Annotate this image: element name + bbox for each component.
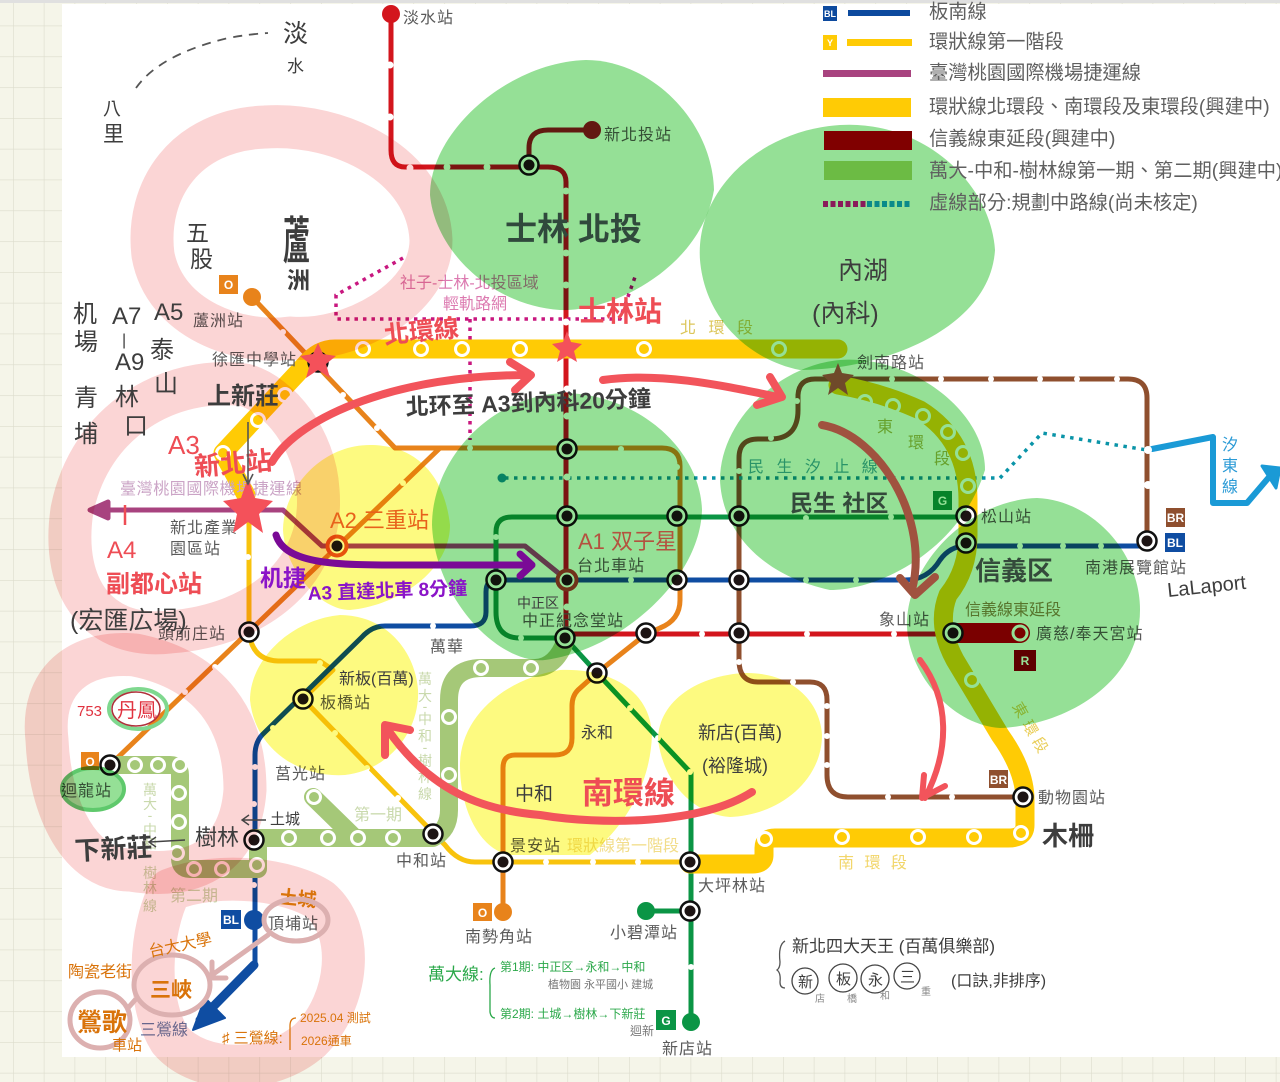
line: Zhonghe-Xinlu orange — [110, 288, 680, 921]
label: south ring section: 南 環 段 — [838, 854, 910, 872]
star: Shilin — [552, 331, 582, 362]
label: LRT network: 社子-士林-北投區域 — [400, 274, 539, 292]
note: Honghui plaza: (宏匯広場) — [70, 607, 187, 635]
legend: circular first stage — [823, 31, 1064, 53]
note: New Taipei station: 新北站 — [193, 445, 273, 482]
badge R — [1014, 650, 1036, 671]
note: four kings of New Taipei: 永 — [868, 972, 883, 989]
highlight: Xindian — [658, 673, 822, 817]
badge G Songshan: G — [938, 494, 947, 508]
note: A3 label: A3 — [168, 430, 200, 460]
note: Xia Xinzhuang: 下新莊 — [74, 832, 153, 866]
line: Shilin-Beitou LRT dotted — [336, 258, 635, 440]
note: Luzhou: 蘆 — [283, 213, 310, 270]
arrow: south ring — [385, 725, 752, 821]
small transfer dots — [182, 62, 1152, 970]
legend: Xinyi extension: 信義線東延段(興建中) — [929, 128, 1115, 150]
label: Wanda line vertical left: 大 — [143, 796, 157, 812]
legend: planned dotted: 虛線部分:規劃中路線(尚未核定) — [929, 192, 1198, 214]
printed station labels: 新店站 — [662, 1040, 713, 1058]
label: Xinyi east extension: 信義線東延段 — [965, 601, 1061, 619]
arrow: Shilin to Neihu — [603, 377, 782, 405]
highlight: Neihu — [700, 125, 995, 370]
label: Wanda line vertical right: 和 — [418, 728, 432, 744]
note: A5 Taishan: A5 — [154, 299, 183, 326]
label: Wanda line vertical right: - — [423, 739, 428, 755]
label: east ring section: 環 — [908, 435, 924, 452]
note: Tucheng orange: 土城 — [277, 886, 318, 912]
note: Tamsui: 淡 — [283, 20, 308, 48]
note: A4 station: A4 — [107, 537, 136, 564]
note: airport Qingpu: 机 — [73, 301, 97, 328]
note: Sanying line schedule: 2026通車 — [301, 1033, 352, 1048]
note: Xinban million: 新板(百萬) — [339, 670, 414, 688]
label: Minsheng-Xizhi line: 民 生 汐 止 線 — [748, 458, 882, 476]
label: circular first stage: 環狀線第一階段 — [567, 836, 679, 855]
note: Sanxia: 三峽 — [150, 979, 192, 1002]
printed station labels: 劍南路站 — [857, 354, 925, 372]
badge BR Zoo: BR — [990, 773, 1007, 787]
badge BR Nangang — [1166, 508, 1185, 527]
note: Wugu: 股 — [190, 246, 213, 272]
note: A5 Taishan: 山 — [154, 371, 178, 398]
label: Wanda line vertical right: 樹 — [418, 753, 432, 769]
note: Tamsui: 水 — [287, 57, 304, 76]
printed station labels: 迴龍站 — [61, 782, 112, 800]
note: Bali: 八 — [103, 99, 121, 119]
label: phase two: 第二期 — [170, 886, 218, 905]
pink highlight scribbles — [46, 127, 431, 1066]
note: four kings of New Taipei: 新 — [798, 974, 813, 991]
line: Songshan-Xindian green — [496, 517, 966, 1031]
note: four kings of New Taipei: 三 — [900, 969, 915, 986]
printed station labels: 中正紀念堂站 — [522, 611, 624, 630]
label: Wanda line vertical left: 線 — [143, 898, 157, 914]
note: Zhonghe: 中和 — [515, 783, 553, 805]
note: airport express: 机捷 — [260, 565, 306, 591]
printed station labels: 園區站 — [170, 540, 221, 558]
printed station labels: 頭前庄站 — [158, 625, 226, 643]
note: A3 express: A3 直達北車 8分鐘 — [307, 576, 467, 605]
note: dashed route to Bali — [136, 33, 268, 88]
printed station labels: 蘆洲站 — [193, 312, 244, 330]
arrow: Xiangshan to Muzha — [920, 660, 945, 798]
note: South ring: 南環線 — [582, 776, 675, 811]
highlight: Zhonghe Yonghe — [460, 670, 652, 855]
badge G Songshan — [933, 491, 952, 510]
note: Shilin station: 士林站 — [578, 296, 662, 327]
legend: Bannan: 板南線 — [929, 1, 987, 23]
note: Neike: (內科) — [812, 300, 879, 328]
label: phase one: 第一期 — [354, 805, 402, 824]
badge O Huilong: O — [85, 755, 95, 769]
badge O Luzhou: O — [224, 278, 233, 292]
note: Danfeng 753 — [77, 689, 167, 729]
label: Wanda line vertical right: 大 — [418, 688, 432, 704]
note: four kings of New Taipei: 新北四大天王 (百萬俱樂部) — [792, 937, 995, 956]
note: NTU: 台大大學 — [147, 930, 213, 961]
note: Wanda line plan: 植物園 永平國小 建城 — [548, 977, 653, 991]
note: north ring time: 北环至 A3到內科20分鐘 — [405, 385, 651, 420]
note: Tucheng arrow — [242, 815, 266, 825]
label: Wanda line vertical left: 萬 — [143, 782, 157, 798]
label: east ring lower: 環 — [1018, 717, 1041, 739]
note: Sanying line schedule — [222, 1010, 371, 1050]
badge O Luzhou — [219, 275, 238, 294]
note: A7 to A9 Linkou: 口 — [124, 413, 148, 440]
label: east ring lower: 東 — [1008, 699, 1031, 721]
note: airport Qingpu: 場 — [74, 329, 98, 356]
printed station labels: 南港展覽館站 — [1085, 559, 1187, 577]
label: Wanda line vertical left: 林 — [143, 880, 157, 896]
line: circular north section — [223, 349, 838, 495]
note: airport Qingpu: 埔 — [74, 421, 98, 448]
label: Wanda line vertical left: 中 — [143, 822, 157, 838]
note: A2 Sanchong: A2 三重站 — [330, 508, 429, 533]
printed station labels: 新北產業 — [170, 519, 238, 537]
scribble: Luzhou Wugu — [152, 127, 431, 339]
legend: ring sections: 環狀線北環段、南環段及東環段(興建中) — [929, 96, 1270, 118]
hand-drawn red route arrows — [272, 362, 945, 821]
printed station labels: 大坪林站 — [698, 877, 766, 895]
legend: Bannan — [823, 1, 987, 23]
note: Wanda line plan: 迴新 — [630, 1023, 654, 1038]
arrow: Neihu to Xiangshan — [822, 425, 935, 595]
printed station labels: 莒光站 — [275, 765, 326, 783]
note: A1 Twin towers: A1 双子星 — [578, 529, 677, 554]
badge BL Dingpu — [221, 910, 241, 929]
note: A7 to A9 Linkou: A9 — [115, 349, 144, 376]
line: circular east and south sections — [690, 385, 1025, 864]
label: east ring section: 段 — [934, 450, 950, 468]
interchange station centers — [104, 160, 1152, 916]
printed station labels: 萬華 — [430, 638, 464, 656]
interchange stations — [100, 156, 1156, 920]
note: A5 Taishan: 泰 — [150, 337, 174, 364]
note: Danfeng 753: 753 — [77, 703, 102, 720]
printed station labels: 徐匯中學站 — [212, 351, 297, 369]
note: Sanying circles and arrows — [70, 899, 328, 1048]
label: east ring section — [877, 418, 950, 468]
star: New Taipei industrial park — [223, 478, 273, 533]
label: Xidong line: 線 — [1222, 478, 1238, 496]
highlight: Huilong oval — [62, 768, 124, 810]
label: Xidong line: 東 — [1222, 457, 1238, 475]
note: Wugu: 五 — [186, 220, 209, 246]
note: Neihu: 內湖 — [838, 257, 888, 285]
pale line labels — [120, 274, 1238, 1039]
note: A4 station: 副都心站 — [106, 571, 202, 598]
label: LRT network: 輕軌路網 — [443, 295, 507, 313]
printed station labels: 廣慈/奉天宮站 — [1036, 625, 1143, 643]
legend: Bannan: BL — [824, 9, 836, 19]
printed station labels: 象山站 — [879, 611, 930, 629]
label: Wanda line vertical right: 中 — [418, 711, 432, 727]
printed station labels: 小碧潭站 — [610, 924, 678, 942]
legend: airport MRT: 臺灣桃園國際機場捷運線 — [929, 62, 1141, 84]
note: four kings of New Taipei: 店 — [815, 992, 825, 1005]
line: Wenhu brown — [739, 379, 1147, 797]
label: Wanda line vertical left: - — [148, 846, 153, 862]
note: A7 to A9 Linkou: | — [122, 332, 126, 349]
printed station labels: 景安站 — [510, 837, 561, 855]
legend — [823, 1, 1280, 214]
note: A7 to A9 Linkou: A7 — [112, 303, 141, 330]
note: LaLaport: LaLaport — [1166, 572, 1247, 602]
note: Sanying line schedule: ♯ 三鶯線: — [222, 1030, 283, 1047]
line: airport MRT purple — [90, 502, 567, 580]
highlight: Banqiao — [250, 615, 418, 775]
note: Shang Xinzhuang: 上新莊 — [207, 383, 279, 410]
note: four kings of New Taipei: 重 — [921, 985, 931, 998]
highlight: Taipei Main — [432, 393, 702, 660]
note: A7 to A9 Linkou: 林 — [115, 384, 139, 411]
line: Xidong solid blue arrow — [1152, 437, 1280, 503]
line badges — [81, 275, 1185, 1030]
label: Sanying line: 三鶯線 — [140, 1021, 188, 1039]
badge G Xindian — [656, 1010, 676, 1030]
label: Wanda line vertical left: 和 — [143, 836, 157, 852]
note: Bali: 里 — [103, 123, 124, 146]
label: Wanda line vertical right: 林 — [418, 769, 432, 785]
label: east ring lower — [1008, 699, 1051, 756]
note: four kings of New Taipei — [777, 937, 1046, 1005]
green district highlights — [62, 60, 1140, 810]
stars: key stations — [223, 331, 854, 533]
note: Zhongzheng district: 中正区 — [517, 595, 559, 611]
legend: circular first stage: Y — [827, 38, 833, 48]
note: Tucheng: 土城 — [270, 811, 300, 828]
label: Xidong line: 汐 — [1222, 436, 1238, 454]
badge BL Dingpu: BL — [223, 913, 239, 927]
line: Minsheng-Xizhi dotted — [498, 433, 1147, 482]
label: north ring section: 北 環 段 — [680, 319, 757, 337]
label: Wanda line vertical right: 萬 — [418, 671, 432, 687]
badge G Xindian: G — [661, 1014, 671, 1028]
star: Jiannan Road — [822, 363, 854, 395]
label: Wanda line vertical left: - — [148, 807, 153, 823]
badge BL Nangang — [1165, 533, 1185, 552]
note: Xindian million: 新店(百萬) — [698, 723, 782, 743]
highlight: Shilin Beitou — [430, 60, 714, 310]
note: four kings of New Taipei: 橋 — [847, 992, 857, 1005]
line: circular first stage yellow — [249, 500, 690, 862]
note: Yingge: 鶯歌 — [77, 1009, 127, 1037]
printed station labels: 動物園站 — [1038, 789, 1106, 807]
badge BR Nangang: BR — [1167, 511, 1184, 525]
note: airport Qingpu: 青 — [74, 385, 98, 412]
scribble: Tucheng Sanxia — [153, 879, 343, 1066]
scribble: Huilong Danfeng — [46, 654, 245, 872]
highlight: Sanchong — [283, 445, 450, 610]
label: Wanda line vertical right: 線 — [418, 786, 432, 802]
label: airport MRT: 臺灣桃園國際機場捷運線 — [120, 480, 303, 498]
label: east ring lower: 段 — [1028, 734, 1051, 756]
printed station labels: 南勢角站 — [465, 928, 533, 946]
note: A4 station — [106, 505, 202, 598]
printed station labels: 中和站 — [396, 852, 447, 870]
note: North ring: 北環線 — [383, 314, 460, 350]
badge O Nanshijiao: O — [478, 906, 487, 920]
printed station labels: 台北車站 — [577, 557, 645, 575]
note: Luzhou: 洲 — [287, 267, 310, 293]
legend: Wanda line: 萬大-中和-樹林線第一期、第二期(興建中) — [929, 160, 1280, 182]
label: Wanda line vertical right: - — [423, 698, 428, 714]
note: four kings of New Taipei: (口訣,非排序) — [951, 972, 1046, 990]
legend: circular first stage: 環狀線第一階段 — [929, 31, 1064, 53]
label: LRT network — [400, 274, 539, 313]
note: pottery street: 陶瓷老街 — [68, 963, 132, 981]
note: four kings of New Taipei: 板 — [836, 971, 851, 988]
note: Shilin Beitou: 士林 北投 — [505, 211, 642, 247]
printed station labels: 松山站 — [981, 508, 1032, 526]
note: down arrow to station — [243, 422, 253, 484]
label: east ring section: 東 — [877, 418, 893, 436]
arrow: A3 to Shilin — [272, 362, 531, 462]
badge O Nanshijiao — [473, 903, 492, 921]
note: Wanda line plan: 萬大線: — [428, 965, 484, 984]
note: Wanda line plan: 第2期: 土城→樹林→下新莊 — [500, 1006, 645, 1021]
note: Yulon: (裕隆城) — [702, 756, 768, 776]
thick line ring stations — [128, 342, 1028, 876]
note: Wanda line plan: 第1期: 中正区→永和→中和 — [500, 959, 645, 974]
printed station labels: 板橋站 — [320, 694, 371, 712]
line: Wanda-Shulin first phase — [254, 642, 565, 838]
legend: Xinyi extension — [824, 128, 1115, 150]
note: Yonghe: 永和 — [581, 724, 613, 742]
note: Shulin: 樹林 — [195, 825, 239, 850]
arrow: airport express — [276, 535, 532, 576]
line: Xinyi east extension — [953, 623, 1020, 643]
note: station: 車站 — [112, 1037, 142, 1054]
printed station labels: 新北投站 — [604, 126, 672, 144]
highlight: Minsheng — [720, 360, 985, 590]
badge O Huilong — [81, 752, 99, 770]
line: Wanda-Shulin second phase — [118, 765, 258, 869]
line: Bannan blue — [193, 546, 1147, 1030]
yellow district highlights — [250, 445, 822, 855]
printed station labels: 淡水站 — [403, 9, 454, 27]
badge BL Nangang: BL — [1167, 536, 1183, 550]
legend: airport MRT — [823, 62, 1141, 84]
printed station labels: 頂埔站 — [268, 915, 319, 933]
line: Tamsui-Xinyi red — [382, 5, 953, 638]
note: four kings of New Taipei: 和 — [880, 990, 890, 1002]
scribble: Xinzhuang — [70, 384, 319, 633]
note: Sanying line schedule: 2025.04 測試 — [300, 1010, 371, 1025]
note: Minsheng community: 民生 社区 — [790, 490, 888, 516]
note: Shulin arrow — [149, 837, 185, 847]
note: Danfeng 753: 丹鳳 — [117, 700, 157, 722]
badge R: R — [1021, 654, 1030, 668]
label: Wanda line vertical left: 樹 — [143, 865, 157, 881]
note: Xinyi district: 信義区 — [975, 556, 1053, 586]
highlight: Xinyi — [907, 498, 1140, 728]
star: Xuhui — [300, 343, 336, 378]
note: Wanda line plan — [428, 959, 654, 1038]
note: Muzha: 木柵 — [1042, 821, 1094, 851]
